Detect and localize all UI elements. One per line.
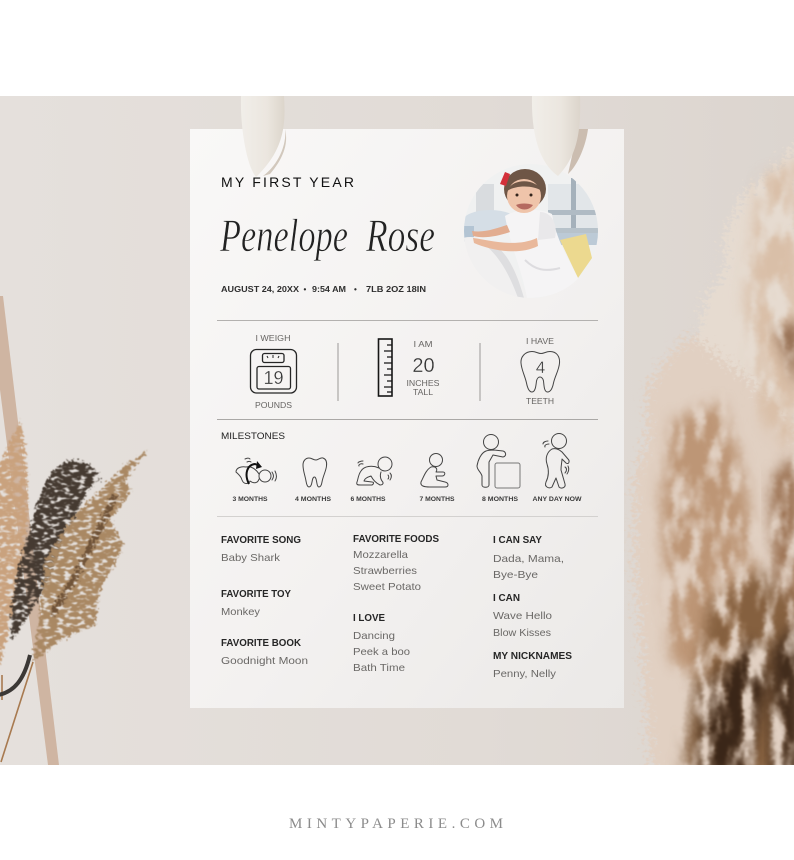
stat: height <box>378 339 440 397</box>
list column 1: Monkey <box>221 606 261 618</box>
list column 1: Baby Shark <box>221 552 281 564</box>
decoration: right pampas grass <box>634 140 794 775</box>
list column 1: FAVORITE SONG <box>221 535 301 546</box>
list column 1: FAVORITE TOY <box>221 589 291 600</box>
stat: weight: I WEIGH <box>256 333 290 343</box>
list column 2: Mozzarella <box>353 549 408 561</box>
icon: scale <box>250 350 296 393</box>
stat: height: 20 <box>412 355 435 377</box>
icon: ruler <box>378 339 392 396</box>
milestone: 4 months <box>295 458 332 503</box>
decoration: wooden stick <box>0 296 59 765</box>
milestone: 3 months: 3 MONTHS <box>232 496 268 503</box>
birth details <box>221 285 426 294</box>
right ribbon <box>532 96 588 176</box>
panel: poster card <box>190 96 624 708</box>
stat: height: INCHES <box>406 378 440 388</box>
list column 3: Bye-Bye <box>493 569 538 581</box>
icon: tooth <box>303 458 327 487</box>
divider <box>217 320 598 321</box>
title: MY FIRST YEAR <box>221 174 354 190</box>
divider <box>480 343 481 401</box>
icon: rotation arrow <box>247 464 260 484</box>
list column 3: I CAN SAY <box>493 535 542 546</box>
list column 3: Penny, Nelly <box>493 668 557 680</box>
icon: baby sitting <box>421 454 448 487</box>
milestone: 7 months <box>420 454 455 503</box>
icon: baby rolling over <box>236 458 276 484</box>
stat: weight <box>250 333 296 410</box>
list column 2: Strawberries <box>353 565 417 577</box>
list column 2: Bath Time <box>353 662 405 674</box>
heading: milestones: MILESTONES <box>221 431 285 442</box>
birth details: 7LB 2OZ 18IN <box>366 285 426 294</box>
birth details: AUGUST 24, 20XX <box>221 285 300 294</box>
milestone: any day now <box>532 434 582 503</box>
birth details: • <box>304 285 306 294</box>
stat: teeth: I HAVE <box>526 336 554 346</box>
divider <box>338 343 339 401</box>
milestone: 6 months: 6 MONTHS <box>350 496 386 503</box>
list column 3: MY NICKNAMES <box>493 651 572 662</box>
stat: weight: 19 <box>263 368 284 388</box>
stat: height: TALL <box>413 387 433 397</box>
list column 2: Sweet Potato <box>353 581 421 593</box>
milestone: 6 months <box>350 457 392 503</box>
list column 2: FAVORITE FOODS <box>353 534 439 545</box>
icon: baby crawling <box>357 457 392 485</box>
milestone: 8 months: 8 MONTHS <box>482 496 519 503</box>
milestone: 4 months: 4 MONTHS <box>295 496 332 503</box>
footer brand: MINTYPAPERIE.COM <box>289 816 503 832</box>
list column 3: Dada, Mama, <box>493 553 564 565</box>
milestone: 7 months: 7 MONTHS <box>420 496 455 503</box>
white band top <box>0 0 794 96</box>
stat: teeth: 4 <box>536 358 545 377</box>
milestone: any day now: ANY DAY NOW <box>532 496 582 503</box>
list column 1: FAVORITE BOOK <box>221 638 302 649</box>
decoration: left dried grass <box>0 420 148 762</box>
photo: smiling baby in circle <box>462 164 598 300</box>
list column 2 <box>353 534 439 674</box>
icon: tooth <box>521 352 560 392</box>
left ribbon <box>241 96 286 177</box>
baby name: Penelope <box>219 210 348 262</box>
divider <box>217 419 598 420</box>
list column 3 <box>493 535 572 680</box>
white band bottom <box>0 765 794 860</box>
list column 1 <box>221 535 308 667</box>
stat: teeth: TEETH <box>526 396 554 406</box>
divider <box>217 516 598 517</box>
list column 2: Dancing <box>353 630 395 642</box>
stat: teeth <box>521 336 560 406</box>
birth details: 9:54 AM <box>312 285 346 294</box>
list column 3: I CAN <box>493 593 520 604</box>
icon: baby walking <box>543 434 569 488</box>
milestone: 8 months <box>477 434 520 503</box>
list column 3: Blow Kisses <box>493 627 551 639</box>
baby name: Rose <box>365 210 435 262</box>
icon: baby standing at block <box>477 434 520 488</box>
birth details: • <box>354 285 357 294</box>
background wall <box>0 96 794 765</box>
list column 2: I LOVE <box>353 613 385 624</box>
milestone: 3 months <box>232 458 276 503</box>
stat: height: I AM <box>414 339 432 349</box>
list column 1: Goodnight Moon <box>221 655 308 667</box>
stat: weight: POUNDS <box>255 400 292 410</box>
list column 3: Wave Hello <box>493 610 552 622</box>
list column 2: Peek a boo <box>353 646 410 658</box>
